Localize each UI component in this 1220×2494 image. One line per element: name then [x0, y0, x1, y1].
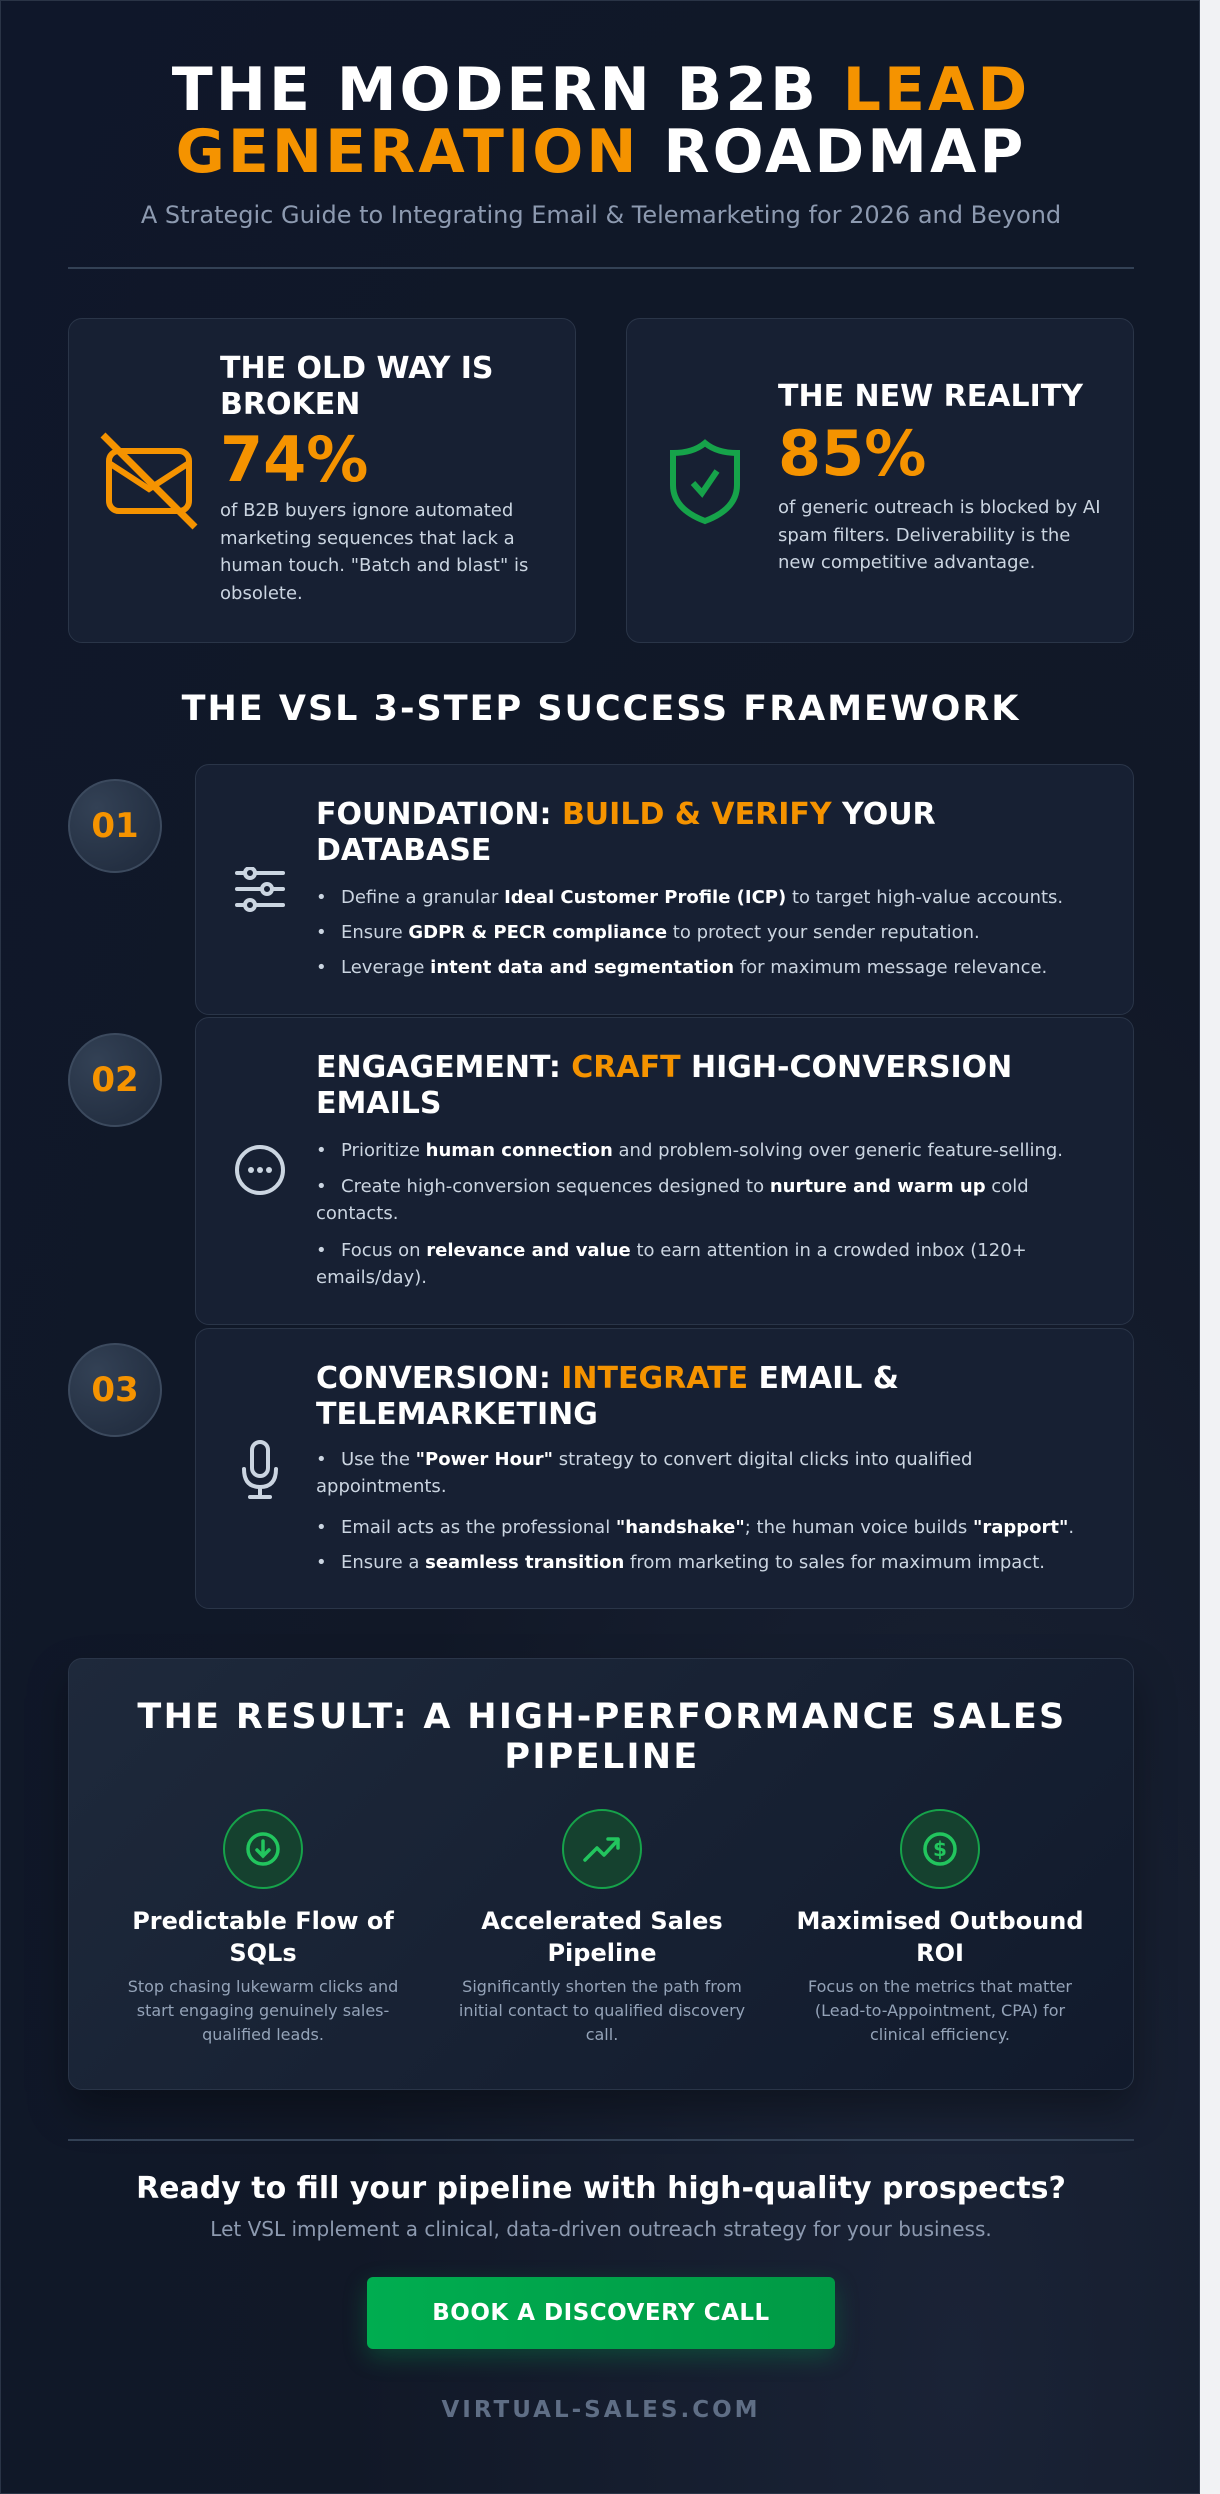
result heading — [137, 1697, 1067, 1777]
bullets: Use the "Power Hour" strategy to convert digital clicks into qualified appointments. — [316, 1449, 972, 1497]
CTA heading: Ready to fill your pipeline with high-quality prospects? — [136, 2171, 1066, 2206]
number 02 — [68, 1033, 162, 1127]
icon: crossed mail — [100, 432, 198, 530]
icon: dollar — [900, 1809, 980, 1889]
icon: dollar: $ — [933, 1837, 947, 1861]
bullets: Define a granular Ideal Customer Profile (ICP) to target high-value accounts. — [341, 887, 1063, 908]
result heading: THE RESULT: A HIGH-PERFORMANCE SALES — [137, 1697, 1067, 1737]
benefit: pipeline: Significantly shorten the path from initial contact to qualified discovery call. — [459, 1977, 745, 2044]
panel: result — [68, 1658, 1134, 2090]
bullets: Ensure GDPR & PECR compliance to protect your sender reputation. — [341, 922, 980, 943]
icon: download circle — [223, 1809, 303, 1889]
text: of B2B buyers ignore automated marketing sequences that lack a human touch. "Batch and blast" is obsolete. — [220, 500, 528, 604]
benefit: pipeline — [459, 1809, 745, 2044]
benefit: SQLs: Stop chasing lukewarm clicks and start engaging genuinely sales-qualified leads. — [128, 1977, 398, 2044]
bullets — [316, 1449, 1074, 1573]
benefit: ROI: Maximised Outbound ROI — [796, 1907, 1084, 1967]
stat 74%: 74% — [220, 423, 368, 496]
title — [172, 55, 1030, 187]
benefit: SQLs: Predictable Flow of SQLs — [132, 1907, 394, 1967]
button — [367, 2277, 835, 2349]
step title: FOUNDATION: BUILD & VERIFY YOUR DATABASE — [316, 797, 936, 868]
benefit: ROI — [796, 1809, 1084, 2044]
step 3 — [68, 1328, 1134, 1609]
panel: new reality — [626, 318, 1134, 643]
CTA subtext: Let VSL implement a clinical, data-driven outreach strategy for your business. — [210, 2217, 992, 2241]
bullets — [318, 887, 1063, 978]
number 03: 03 — [91, 1370, 139, 1410]
panel: old way — [68, 318, 576, 643]
bullets: Create high-conversion sequences designed to nurture and warm up cold contacts. — [316, 1176, 1029, 1224]
benefit: pipeline: Accelerated Sales Pipeline — [481, 1907, 723, 1967]
title: THE MODERN B2B LEAD — [172, 55, 1030, 125]
bullets: Email acts as the professional "handshake"; the human voice builds "rapport". — [341, 1517, 1074, 1538]
number 01 — [68, 779, 162, 873]
stat 85%: 85% — [778, 417, 926, 490]
icon: microphone — [242, 1440, 278, 1499]
step title: ENGAGEMENT: CRAFT HIGH-CONVERSION EMAILS — [316, 1050, 1012, 1121]
title: GENERATION ROADMAP — [176, 117, 1026, 187]
heading: framework: THE VSL 3-STEP SUCCESS FRAMEWORK — [182, 689, 1020, 729]
number 03 — [68, 1343, 162, 1437]
heading: THE NEW REALITY — [778, 379, 1083, 414]
icon: chat dots — [235, 1145, 285, 1195]
step 2 — [68, 1017, 1134, 1325]
step title: CONVERSION: INTEGRATE EMAIL & TELEMARKETING — [316, 1361, 899, 1432]
bullets: Prioritize human connection and problem-solving over generic feature-selling. — [341, 1140, 1063, 1161]
result heading: PIPELINE — [504, 1737, 700, 1777]
bullets: Focus on relevance and value to earn attention in a crowded inbox (120+ emails/day). — [316, 1240, 1027, 1288]
icon: shield — [670, 439, 740, 524]
button: BOOK A DISCOVERY CALL — [432, 2300, 770, 2326]
footer: VIRTUAL-SALES.COM — [441, 2397, 761, 2423]
subtitle: A Strategic Guide to Integrating Email & Telemarketing for 2026 and Beyond — [141, 201, 1061, 229]
step 1 — [68, 764, 1134, 1015]
number 01: 01 — [91, 806, 139, 846]
bullets — [316, 1140, 1063, 1288]
heading: THE OLD WAY IS BROKEN — [220, 351, 494, 422]
bullets: Ensure a seamless transition from marketing to sales for maximum impact. — [341, 1552, 1045, 1573]
benefit: SQLs — [128, 1809, 398, 2044]
bullets: Leverage intent data and segmentation for maximum message relevance. — [341, 957, 1047, 978]
icon: sliders — [235, 867, 285, 912]
text: of generic outreach is blocked by AI spam filters. Deliverability is the new competitive advantage. — [778, 497, 1101, 573]
number 02: 02 — [91, 1060, 139, 1100]
icon: trend up — [562, 1809, 642, 1889]
benefit: ROI: Focus on the metrics that matter (Lead-to-Appointment, CPA) for clinical efficiency. — [808, 1977, 1072, 2044]
